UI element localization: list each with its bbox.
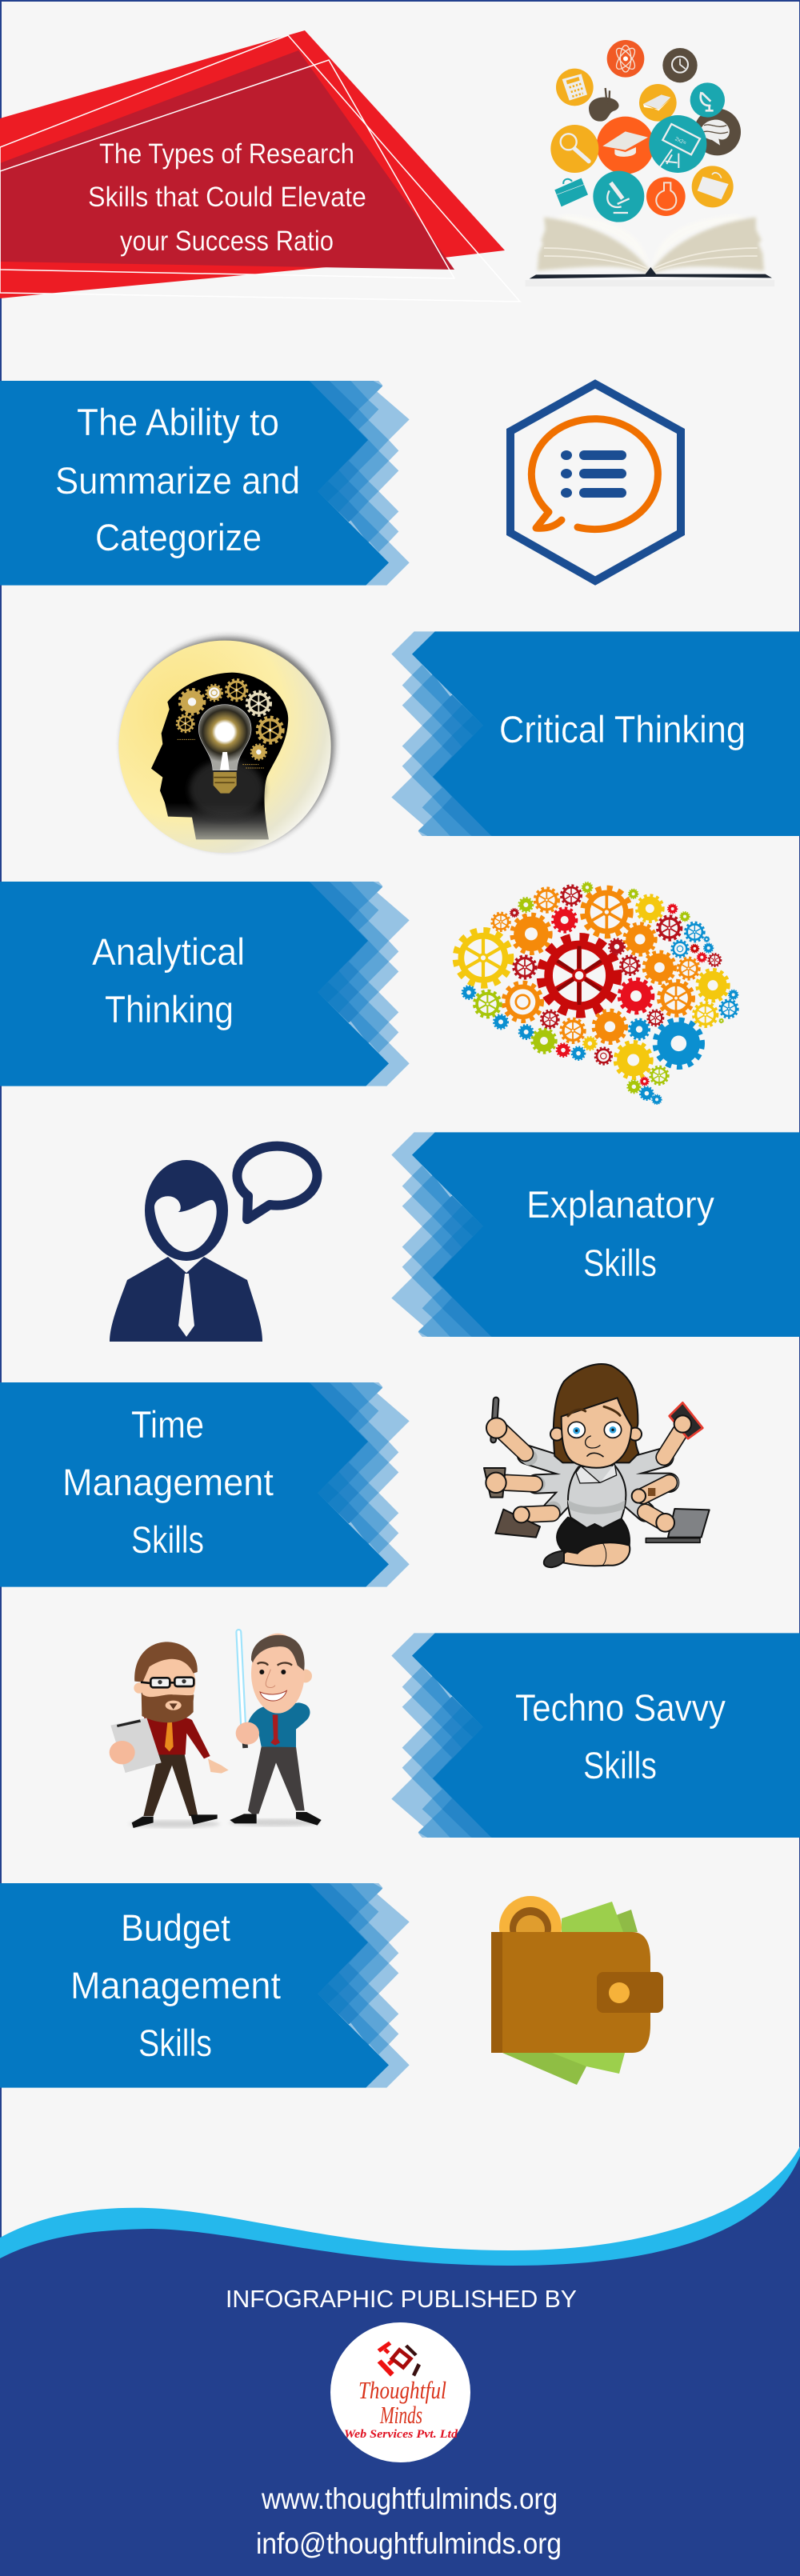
heading: analytical thinking: Analytical (92, 930, 245, 973)
icon: open book with subject bubbles (526, 40, 774, 286)
panel: techno savvy skills (391, 1633, 800, 1838)
logo: thoughtful minds (330, 2322, 470, 2462)
title text: Skills that Could Elevate (88, 182, 366, 213)
panel: explanatory skills (391, 1132, 800, 1337)
heading: time management skills: Skills (131, 1518, 204, 1561)
logo: thoughtful minds: Web Services Pvt. Ltd (344, 2428, 458, 2441)
title text (88, 138, 366, 257)
heading: budget management skills: Skills (138, 2022, 212, 2064)
panel: ability to summarize and categorize (0, 381, 410, 586)
icon: head with light bulb and gears (118, 638, 334, 853)
logo: thoughtful minds: Minds (379, 2401, 422, 2429)
panel: analytical thinking (0, 882, 410, 1086)
heading: summarize: The Ability to (77, 401, 279, 443)
icon: list speech bubble in hexagon (510, 384, 681, 581)
heading: explanatory skills: Skills (583, 1242, 657, 1284)
icon: two tech-savvy men (110, 1632, 322, 1828)
heading: budget management skills (70, 1906, 281, 2064)
icon: brain made of gears (456, 882, 738, 1104)
title banner (0, 30, 520, 302)
panel: time management skills (0, 1382, 410, 1587)
logo: thoughtful minds: Thoughtful (358, 2376, 446, 2404)
heading: analytical thinking (92, 930, 245, 1030)
footer heading: INFOGRAPHIC PUBLISHED BY (226, 2285, 577, 2313)
panel: critical thinking (391, 631, 800, 836)
icon: multitasking woman (484, 1364, 710, 1567)
heading: summarize: Summarize and (55, 459, 300, 502)
panel: budget management skills (0, 1883, 410, 2088)
title text: The Types of Research (99, 138, 354, 170)
heading: budget management skills: Budget (121, 1906, 230, 1949)
icon: person with speech bubble (110, 1146, 317, 1342)
icon: wallet with coin and cash (491, 1896, 663, 2085)
heading: techno savvy skills: Techno Savvy (515, 1686, 726, 1729)
heading: time management skills (62, 1403, 274, 1561)
icon: open book with subject bubbles: 2x2= (674, 136, 687, 146)
contact details: info@thoughtfulminds.org (256, 2527, 562, 2560)
contact details (256, 2482, 562, 2560)
footer wave (0, 2146, 800, 2576)
heading: analytical thinking: Thinking (105, 988, 234, 1030)
title text: your Success Ratio (120, 226, 334, 257)
heading: explanatory skills: Explanatory (526, 1183, 714, 1226)
contact details: www.thoughtfulminds.org (261, 2482, 558, 2515)
heading: summarize (55, 401, 300, 558)
heading: techno savvy skills: Skills (583, 1744, 657, 1786)
heading: explanatory skills (526, 1183, 714, 1284)
heading: time management skills: Management (62, 1461, 274, 1503)
heading: critical thinking: Critical Thinking (499, 708, 746, 750)
heading: time management skills: Time (131, 1403, 204, 1446)
heading: techno savvy skills (515, 1686, 726, 1786)
heading: budget management skills: Management (70, 1964, 281, 2006)
heading: summarize: Categorize (95, 516, 262, 558)
